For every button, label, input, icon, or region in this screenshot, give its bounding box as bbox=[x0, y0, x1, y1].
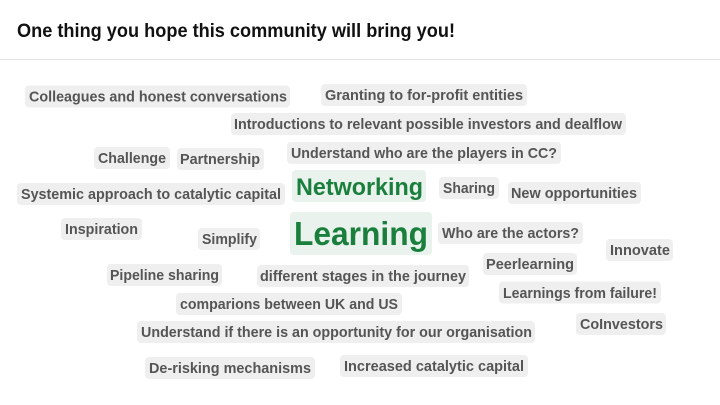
word: Understand if there is an opportunity for our organisation: Understand if there is an opportunity for our organisation bbox=[141, 324, 532, 341]
word: Learnings from failure!: Learnings from failure! bbox=[503, 285, 657, 302]
word: comparions between UK and US: comparions between UK and US bbox=[180, 296, 398, 313]
word: Increased catalytic capital: Increased catalytic capital bbox=[344, 358, 524, 375]
word: Who are the actors?: Who are the actors? bbox=[442, 225, 579, 242]
word cloud bbox=[17, 84, 673, 379]
word: Colleagues and honest conversations: Colleagues and honest conversations bbox=[29, 89, 287, 106]
word: different stages in the journey: different stages in the journey bbox=[260, 268, 467, 285]
word: CoInvestors: CoInvestors bbox=[580, 316, 663, 333]
word: Inspiration: Inspiration bbox=[65, 221, 138, 238]
word: De-risking mechanisms: De-risking mechanisms bbox=[149, 360, 311, 377]
word: Challenge: Challenge bbox=[98, 150, 166, 167]
title: One thing you hope this community will bring you! bbox=[17, 21, 455, 42]
word: Pipeline sharing: Pipeline sharing bbox=[110, 267, 219, 284]
word: Learning: Learning bbox=[294, 215, 428, 252]
word: Peerlearning: Peerlearning bbox=[486, 256, 574, 273]
word: New opportunities: New opportunities bbox=[511, 185, 637, 202]
word: Innovate: Innovate bbox=[610, 242, 670, 259]
word: Networking: Networking bbox=[296, 174, 423, 201]
word: Introductions to relevant possible investors and dealflow: Introductions to relevant possible investors and dealflow bbox=[234, 116, 622, 133]
word: Sharing: Sharing bbox=[443, 180, 495, 197]
word: Partnership: Partnership bbox=[180, 151, 260, 168]
word: Systemic approach to catalytic capital: Systemic approach to catalytic capital bbox=[21, 186, 281, 203]
word: Simplify: Simplify bbox=[202, 231, 258, 248]
word: Understand who are the players in CC?: Understand who are the players in CC? bbox=[291, 145, 557, 162]
word: Granting to for-profit entities: Granting to for-profit entities bbox=[325, 87, 523, 104]
